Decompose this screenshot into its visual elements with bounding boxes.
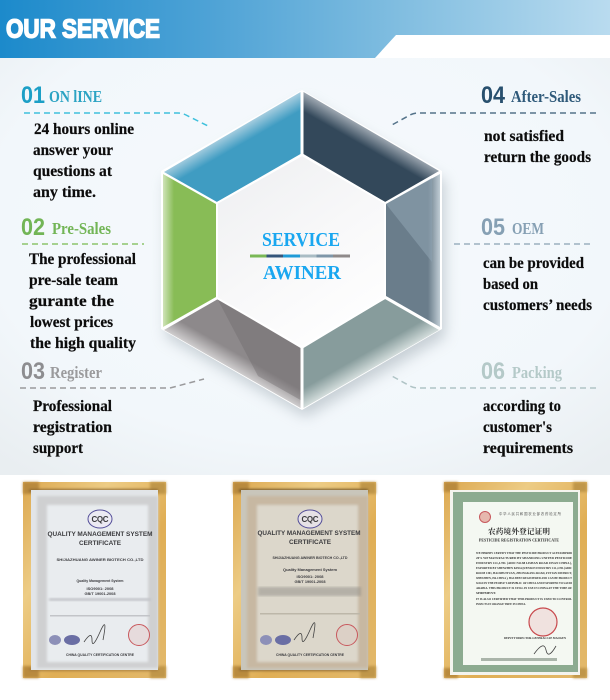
certificate 2: SHIJIAZHUANG AWINER BIOTECH CO.,LTD [272,556,348,560]
segment: left green [163,174,216,327]
certificate 1: ISO9001: 2008 [86,587,114,591]
certificate 2 [233,482,376,678]
segment: bottom left [164,299,300,408]
certificate 2: GB/T 19001-2008 [294,580,326,584]
item 06: according to [483,398,561,415]
segment: top right navy [304,92,439,202]
item 01: 24 hours online [34,121,134,138]
item 01: any time. [33,184,96,201]
certificate 1: Quality Management System [76,579,124,583]
item 05: customers’ needs [483,297,592,314]
item 01: answer your [33,142,113,159]
item 06: 06 [481,358,505,385]
item 05: based on [483,276,538,293]
item 06: customer's [483,419,552,436]
certificate 1: SHIJIAZHUANG AWINER BIOTECH CO.,LTD [56,558,144,562]
item 02: lowest prices [30,314,113,331]
certificate 3: ARABIA. THIS PRODUCT IS STILL IN USE IN CHINA AT THE TIME OF [476,586,572,590]
item 05: can be provided [483,255,584,272]
item 04: 04 [481,82,506,109]
certificate 2: Quality Management System [283,568,337,572]
certificate 3: SOLD IN THE PEOPLE'S REPUBLIC OF CHINA AND EXPORTED TO SAUDI [476,581,573,585]
item 03: support [33,440,84,457]
certificate 3: PESTICIDE REGISTRATION CERTIFICATE [479,538,560,542]
item 03: 03 [21,358,45,385]
item 02: gurante the [29,293,114,310]
title: OUR SERVICE [6,14,160,44]
certificate 1: CERTIFICATE [79,540,121,547]
certificate 3: DEPUTY DIRECTOR-GENERAL:LIE MAOGEN [504,636,567,640]
certificate 3: INSECTS IN ORANGE TREE IN CHINA. [476,602,526,606]
core label: SERVICE: SERVICE [262,229,340,251]
item 04: After-Sales [511,87,581,106]
item 04: not satisfied [484,128,564,145]
certificate 1: CHINA QUALITY CERTIFICATION CENTRE [66,653,134,657]
segment: top left blue [164,92,300,202]
hexagon diagram [161,90,445,417]
item 03 [20,358,204,457]
segment: right slate [386,174,440,327]
certificate 3: EXPORTED BY SHENZHEN KINGQUENSON INDUSTRY CO.,LTD.(ADD: [476,566,572,570]
item 01: 01 [21,82,45,109]
item 02: the high quality [30,335,136,352]
certificate 3: SHENZHEN, P.R.CHINA ), HAS BEEN REGISTERED AND CAN BE PRODUCT [476,576,572,580]
item 03: Register [50,363,102,382]
certificate 2: ISO9001: 2008 [296,575,324,579]
certificate 3: 中华人民共和国农业部农药检定所 [499,511,562,516]
certificate 2: QUALITY MANAGEMENT SYSTEM [258,530,360,537]
item 05: OEM [512,219,544,238]
certificate 2: CHINA QUALITY CERTIFICATION CENTRE [276,653,344,657]
certificate 1: QUALITY MANAGEMENT SYSTEM [48,531,152,538]
item 04 [390,82,596,166]
item 02: The professional [29,251,137,268]
core colour bar [250,254,350,258]
item 05: 05 [481,214,505,241]
core hexagon [217,155,385,347]
item 06: requirements [483,440,573,457]
item 03: Professional [33,398,113,415]
segment: bottom right [304,299,439,408]
item 01 [21,82,208,201]
item 02: pre-sale team [29,272,118,289]
page background panel [0,58,610,475]
certificate 3: 农药境外登记证明 [487,526,550,536]
item 06 [390,358,596,457]
core label: AWINER: AWINER [263,262,341,284]
certificate 3: WE HEREBY CERTIFY THAT THE PESTICIDE PRODUCT ACETAMIPRID [476,551,573,555]
certificate 1: CQC [92,515,109,524]
certificate 1: GB/T 19001-2008 [84,592,116,596]
item 01: ON lINE [49,87,102,106]
certificate 3: 20% WP MANUFACTURED BY SHANDONG UNITED PESTICIDE [476,556,572,560]
item 02 [21,214,144,352]
certificate 2: CERTIFICATE [289,539,331,546]
header banner [0,0,610,58]
item 01: questions at [33,163,113,180]
item 02: Pre-Sales [52,219,111,238]
item 06: Packing [512,363,562,382]
item 02: 02 [21,214,45,241]
item 04: return the goods [484,149,591,166]
certificate 3: SHIPMENT. [476,591,496,595]
certificate 2: CQC [302,515,319,524]
certificate 3: INDUSTRY CO.,LTD. (ADD: NO.88 LISHAN ROAD JINAN CHINA ), [476,561,572,565]
certificate 3: IT IS ALSO CERTIFIED THAT THIS PRODUCT IS USED TO CONTROL [476,597,572,601]
certificate 3 [444,482,587,678]
certificate 1 [23,482,166,678]
certificate 3: ROOM 1301, HAOSHUIYUAN, ZHONGKANG ROAD, FUTIAN DISTRICT, [476,571,572,575]
item 03: registration [33,419,112,436]
item 05 [454,214,592,314]
